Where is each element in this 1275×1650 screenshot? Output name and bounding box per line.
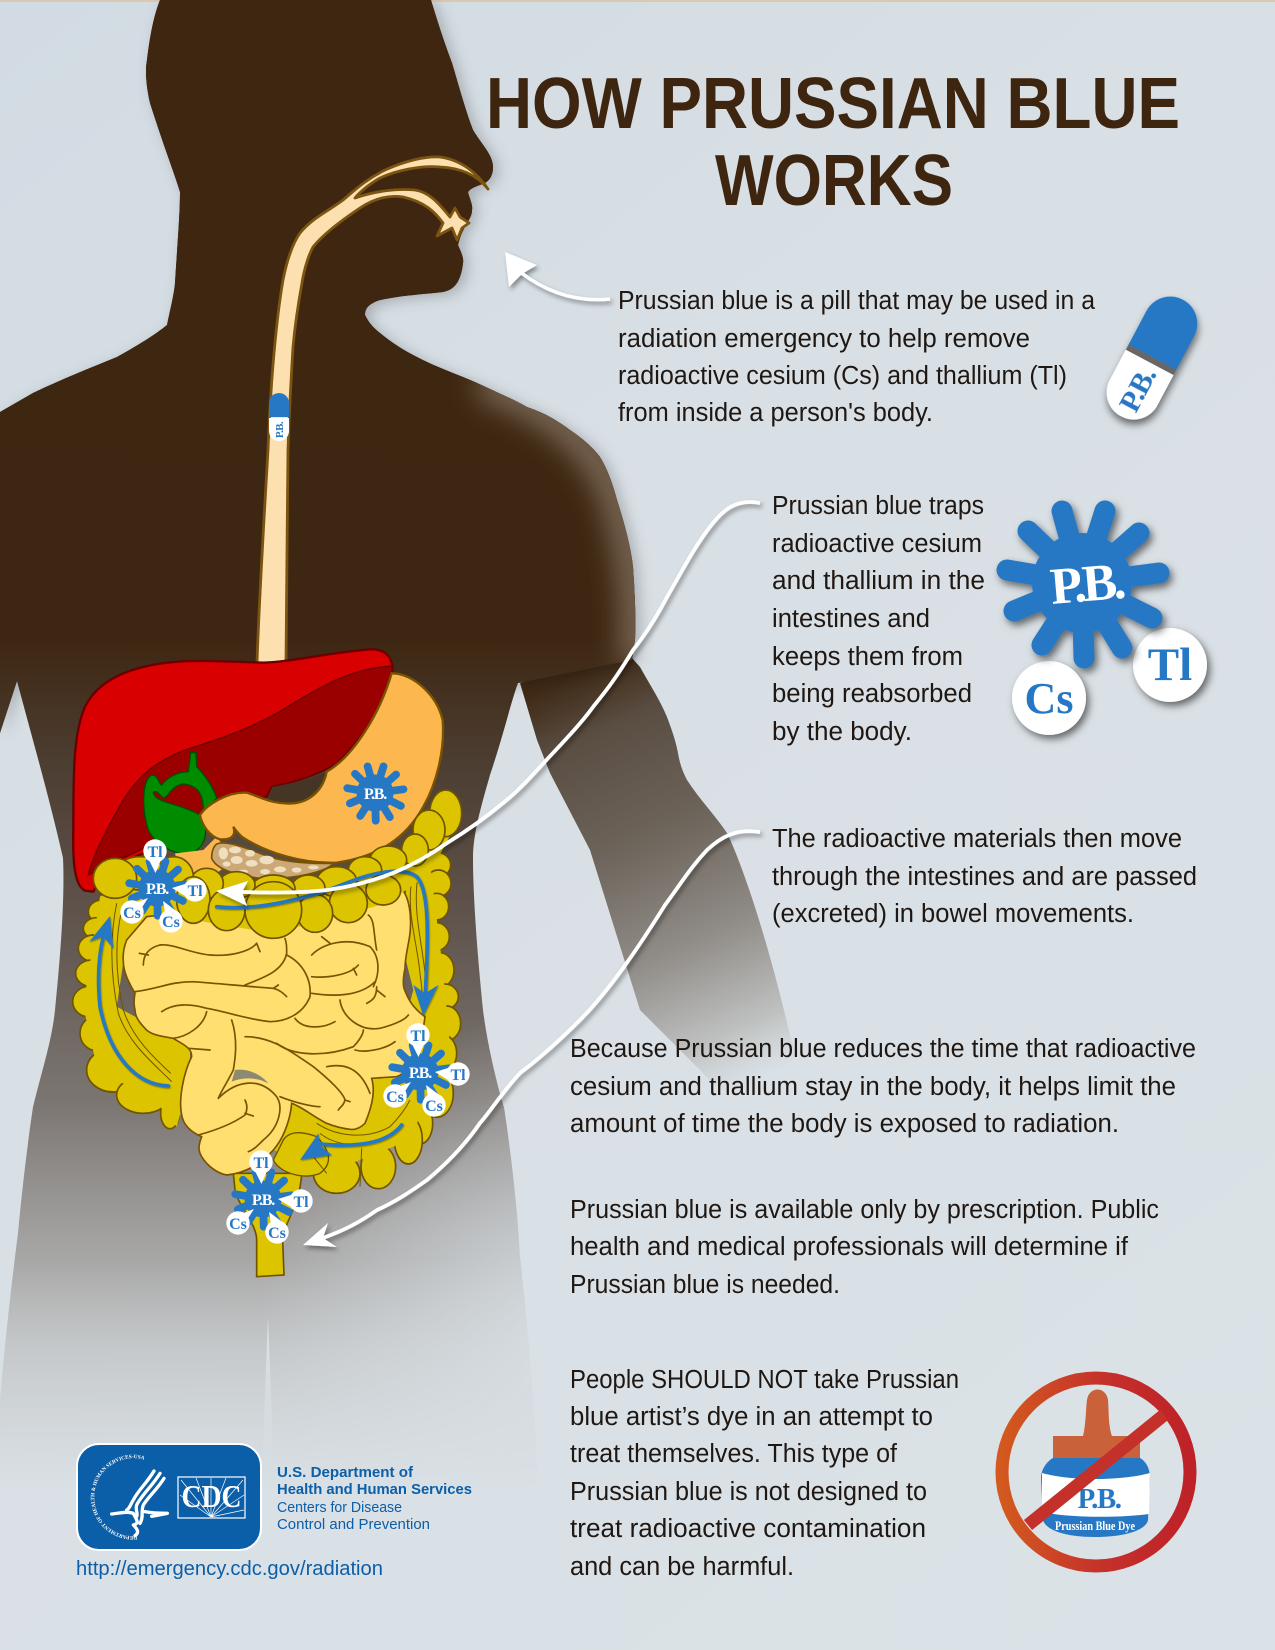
text: dye warning: People SHOULD NOT take Prussian [570, 1366, 959, 1394]
text: how it traps: intestines and [772, 605, 930, 633]
molecule at colon top with Cs and Tl: P.B. [146, 881, 169, 898]
transverse colon [93, 790, 462, 938]
cavity between liver and stomach [267, 772, 327, 803]
molecule at rectum with Cs and Tl: Tl [293, 1194, 309, 1211]
title: HOW PRUSSIAN BLUE [486, 64, 1180, 144]
molecule at descending colon with Cs and Tl: Tl [450, 1067, 466, 1084]
molecule at colon top with Cs and Tl: Cs [123, 905, 141, 922]
pancreas [212, 843, 333, 879]
agency text: U.S. Department of [277, 1464, 414, 1481]
molecule at descending colon with Cs and Tl: Cs [386, 1089, 404, 1106]
Tl ball [1133, 628, 1207, 702]
Cs ball: Cs [1025, 674, 1073, 723]
star label: P.B. [1048, 553, 1126, 616]
large and small intestine [73, 790, 462, 1277]
molecule at rectum with Cs and Tl: Tl [253, 1155, 269, 1172]
lower stomach stub [175, 837, 233, 873]
text: dye warning: blue artist’s dye in an attempt to [570, 1403, 933, 1431]
molecule at colon top with Cs and Tl [120, 839, 207, 933]
text: what Prussian blue is [618, 287, 1096, 427]
small intestine [123, 887, 425, 1175]
agency text: Control and Prevention [277, 1517, 430, 1533]
upper body soft shadow [0, 0, 635, 733]
molecule at rectum with Cs and Tl: P.B. [252, 1192, 275, 1209]
molecule at colon top with Cs and Tl: Tl [147, 844, 163, 861]
transverse colon base [103, 800, 458, 933]
text: dye warning: treat radioactive contamination [570, 1515, 926, 1543]
text: how it traps [772, 492, 985, 746]
CDC HHS logo [76, 1443, 262, 1551]
arrow: pill text to mouth [505, 252, 610, 300]
dye name: Prussian Blue Dye [1055, 1519, 1135, 1533]
molecule at rectum with Cs and Tl [226, 1150, 313, 1244]
text: prescription [570, 1196, 1159, 1299]
bottle label [1042, 1473, 1150, 1517]
prohibition sign [1002, 1378, 1190, 1566]
molecule at descending colon with Cs and Tl: Cs [425, 1098, 443, 1115]
molecule at rectum with Cs and Tl: Cs [229, 1216, 247, 1233]
stomach [200, 673, 443, 863]
liver dark lobe [88, 666, 392, 875]
pill in esophagus [269, 393, 289, 441]
molecule at descending colon with Cs and Tl: P.B. [409, 1065, 432, 1082]
molecule in stomach: P.B. [364, 786, 387, 803]
sliver between legs [262, 1317, 274, 1470]
text: prescription: Prussian blue is available only by prescription. Public [570, 1196, 1159, 1224]
text: exposure [570, 1035, 1196, 1138]
text: exposure: amount of time the body is exposed to radiation. [570, 1110, 1119, 1138]
agency text: Health and Human Services [277, 1481, 472, 1498]
molecule at rectum with Cs and Tl: Cs [268, 1225, 286, 1242]
icon: capsule: P.B. [1113, 362, 1163, 418]
descending colon bumps [423, 852, 451, 878]
text: dye warning: treat themselves. This type of [570, 1440, 898, 1468]
colon inner ridges [112, 880, 425, 1187]
upper digestive organs [73, 649, 443, 892]
text: exposure: cesium and thallium stay in the body, it helps limit the [570, 1073, 1176, 1101]
rectum [233, 1173, 302, 1277]
colon base fill [83, 860, 193, 1127]
text: prescription: Prussian blue is needed. [570, 1271, 840, 1299]
HHS eagle [112, 1471, 167, 1536]
text: prescription: health and medical professionals will determine if [570, 1233, 1129, 1261]
ascending colon bumps [88, 900, 115, 923]
text: how it traps: by the body. [772, 718, 912, 746]
URL: http://emergency.cdc.gov/radiation [76, 1558, 383, 1580]
arrow along sigmoid colon [300, 1125, 402, 1160]
arrow up ascending colon [89, 916, 168, 1086]
molecule at colon top with Cs and Tl: Tl [187, 883, 203, 900]
text: dye warning: Prussian blue is not designed to [570, 1478, 927, 1506]
arrow: excretion text to rectum [303, 831, 760, 1247]
gap between intestine loops [232, 1070, 268, 1083]
text: excretion: The radioactive materials then move [772, 825, 1182, 853]
text: exposure: Because Prussian blue reduces the time that radioactive [570, 1035, 1196, 1063]
head and torso [0, 0, 635, 1510]
text: excretion: through the intestines and are passed [772, 863, 1197, 891]
text: what Prussian blue is: radioactive cesium (Cs) and thallium (Tl) [618, 362, 1067, 390]
text: excretion: (excreted) in bowel movements. [772, 900, 1134, 928]
shoulder edge highlight [480, 382, 637, 665]
text: how it traps: keeps them from [772, 643, 963, 671]
text: how it traps: and thallium in the [772, 567, 985, 595]
intestine folds [135, 915, 408, 1152]
right arm [520, 650, 805, 1090]
human silhouette [0, 0, 805, 1510]
arrow: trapping text to colon [216, 502, 760, 906]
pill in esophagus: P.B. [274, 421, 286, 438]
colon outer sections [73, 852, 461, 1193]
text: how it traps: being reabsorbed [772, 680, 972, 708]
agency text: Centers for Disease [277, 1500, 402, 1516]
text: excretion [772, 825, 1197, 928]
gallbladder [144, 753, 217, 854]
molecule at descending colon with Cs and Tl [383, 1023, 470, 1117]
bottle jar [1041, 1458, 1150, 1537]
text: how it traps: Prussian blue traps [772, 492, 984, 520]
text: how it traps: radioactive cesium [772, 530, 982, 558]
blue arrows [89, 871, 438, 1160]
liver [73, 649, 392, 892]
title [486, 64, 1180, 221]
text: dye warning [570, 1366, 959, 1581]
Tl ball: Tl [1148, 639, 1192, 691]
bottle label text: P.B. [1078, 1483, 1121, 1515]
text: what Prussian blue is: Prussian blue is a pill that may be used in a [618, 287, 1096, 315]
CDC box: CDC [182, 1478, 242, 1514]
icon: capsule [1097, 287, 1207, 429]
Cs ball [1012, 661, 1086, 735]
title: WORKS [715, 141, 953, 221]
star body [1007, 511, 1159, 658]
icon: prohibited dye bottle [1002, 1378, 1190, 1566]
logo panel [77, 1444, 261, 1550]
HHS circular seal text: DEPARTMENT OF HEALTH & HUMAN SERVICES-USA [90, 1454, 144, 1540]
text: dye warning: and can be harmful. [570, 1553, 794, 1581]
text: what Prussian blue is: radiation emergency to help remove [618, 325, 1030, 353]
sigmoid colon [273, 1133, 328, 1176]
icon: large molecule with Cs and Tl [1007, 511, 1207, 735]
text: what Prussian blue is: from inside a person's body. [618, 399, 933, 427]
esophagus tube [257, 157, 488, 663]
arrow across and down colon [217, 871, 438, 1016]
molecule at colon top with Cs and Tl: Cs [162, 914, 180, 931]
molecule at descending colon with Cs and Tl: Tl [410, 1028, 426, 1045]
agency text [277, 1464, 472, 1533]
molecule in stomach [347, 766, 403, 821]
bottle cap [1053, 1390, 1140, 1465]
